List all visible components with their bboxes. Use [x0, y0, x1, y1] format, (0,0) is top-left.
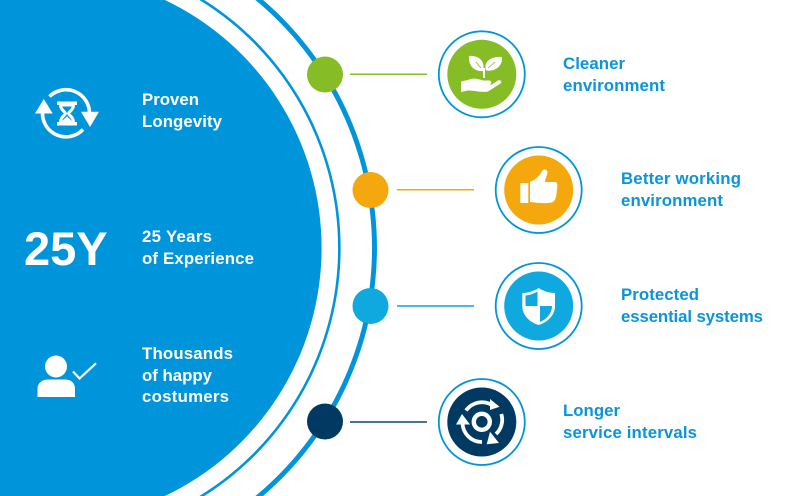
text: Proven Longevity: Proven [142, 90, 199, 109]
text: 25 Years of Experience: of Experience [142, 249, 254, 268]
connector line: green [350, 74, 427, 75]
text: Cleaner environment [563, 54, 665, 95]
text: Better working environment: Better working [621, 169, 741, 188]
icon: cycle arrows around ring [447, 388, 516, 456]
connector dot: navy [307, 404, 343, 440]
connector line: navy [350, 421, 427, 423]
icon: thumbs up [504, 156, 573, 224]
text: Proven Longevity: Longevity [142, 112, 223, 131]
item: cleaner environment [307, 31, 665, 117]
text: Cleaner environment: Cleaner [563, 54, 625, 73]
thick outer ring [255, 0, 377, 496]
text: Cleaner environment: environment [563, 76, 665, 95]
connector dot: orange [352, 172, 388, 208]
text: Longer service intervals [563, 401, 697, 442]
connector line: orange [397, 189, 474, 190]
item: protected essential systems [352, 263, 763, 349]
text: Better working environment: environment [621, 191, 723, 210]
text: Thousands of happy costumers [142, 344, 233, 406]
icon: hourglass with cycle arrows [35, 90, 99, 137]
text: 25Y: 25Y [24, 222, 108, 275]
text: Thousands of happy costumers: Thousands [142, 344, 233, 363]
text: Longer service intervals: service intervals [563, 423, 697, 442]
connector dot: green [307, 56, 343, 92]
connector dot: light blue [352, 288, 388, 324]
text: Protected essential systems [621, 285, 763, 326]
icon ring: navy [439, 379, 525, 465]
icon: hand holding plant [447, 40, 516, 109]
text: Thousands of happy costumers: of happy [142, 366, 213, 385]
text: Proven Longevity [142, 90, 223, 131]
icon ring: light blue [496, 263, 582, 349]
item: longer service intervals [307, 379, 697, 465]
panel: large blue semicircle [0, 0, 322, 496]
connector line: light blue [397, 305, 474, 307]
text: Protected essential systems: essential systems [621, 307, 763, 326]
text: 25 Years of Experience: 25 Years [142, 227, 212, 246]
text: 25 Years of Experience [142, 227, 254, 268]
text: Longer service intervals: Longer [563, 401, 620, 420]
icon: shield [504, 272, 573, 340]
thin outer ring [199, 0, 341, 496]
text: Thousands of happy costumers: costumers [142, 387, 229, 406]
icon: person with check mark [38, 356, 96, 397]
item: better working environment [352, 147, 741, 233]
text: Better working environment [621, 169, 741, 210]
icon ring: green [439, 31, 525, 117]
icon ring: orange [496, 147, 582, 233]
text: Protected essential systems: Protected [621, 285, 699, 304]
